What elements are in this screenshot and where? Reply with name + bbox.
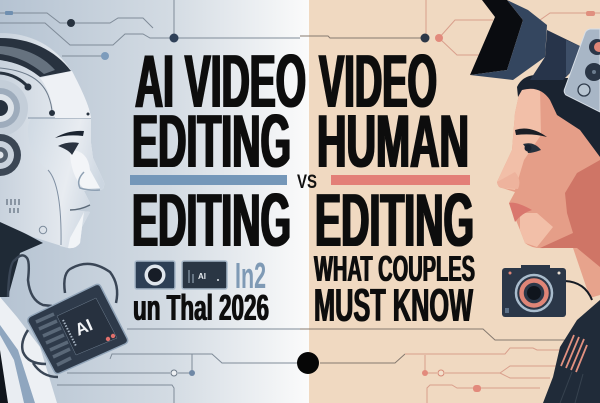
circuit lines: AI side	[0, 0, 309, 403]
jaw highlight	[520, 213, 553, 247]
forehead highlight	[497, 88, 541, 190]
AI tablet device with cables	[8, 255, 128, 377]
circuit lines: human side	[300, 0, 600, 403]
robot exposed circuitry dome	[0, 38, 71, 77]
tablet body	[28, 284, 128, 374]
robot vents	[7, 199, 19, 213]
label: In2: In2	[235, 255, 266, 296]
robot shoulder	[0, 297, 57, 403]
title: AI Video Editing: AI VIDEO	[135, 39, 306, 123]
divider bar: AI	[130, 175, 287, 185]
title: Video Human Editing: HUMAN	[317, 99, 469, 183]
face	[497, 82, 600, 267]
robot eye and brow	[55, 131, 84, 155]
title: AI Video Editing	[132, 39, 306, 262]
robot ear discs	[0, 80, 28, 176]
icon: AI screen tile: AI	[198, 272, 206, 281]
neck	[572, 245, 600, 298]
cables	[8, 255, 52, 306]
robot face plate	[28, 118, 104, 248]
robot head illustration	[0, 33, 104, 297]
camera on head	[470, 0, 600, 112]
lips	[509, 203, 532, 222]
nose shade	[497, 172, 519, 189]
lens barrel	[530, 30, 582, 80]
shirt	[543, 300, 600, 403]
divider bar: human	[331, 175, 470, 185]
robot nose and mouth	[70, 172, 100, 210]
tablet AI label: AI	[72, 315, 95, 340]
title: AI Video Editing: EDITING	[132, 99, 291, 183]
brow and eye	[515, 129, 547, 153]
title: AI Video Editing: EDITING	[132, 178, 291, 262]
subtitle: What couples must know: MUST KNOW	[314, 279, 473, 331]
lens hood	[470, 0, 523, 75]
icon: camera tile	[135, 261, 175, 289]
title: Video Human Editing: VIDEO	[319, 39, 437, 123]
subtitle: What couples must know: WHAT COUPLES	[314, 248, 475, 289]
label: un Thal 2026: un Thal 2026	[133, 287, 269, 328]
icon: AI screen tile	[182, 261, 227, 289]
camera body	[564, 29, 600, 112]
decorative centre node	[297, 352, 319, 374]
tablet screen	[57, 298, 117, 355]
robot head shell	[0, 33, 104, 248]
subtitle: What couples must know	[314, 248, 475, 331]
VS label: VS	[297, 172, 317, 193]
title: Video Human Editing	[315, 39, 474, 262]
woman head illustration	[497, 75, 600, 298]
background: human side	[309, 0, 600, 403]
small camera icon with cable	[502, 265, 592, 317]
cheek shadow	[540, 160, 600, 267]
background: AI side	[0, 0, 309, 403]
robot neck	[0, 220, 43, 297]
hair	[517, 75, 600, 157]
